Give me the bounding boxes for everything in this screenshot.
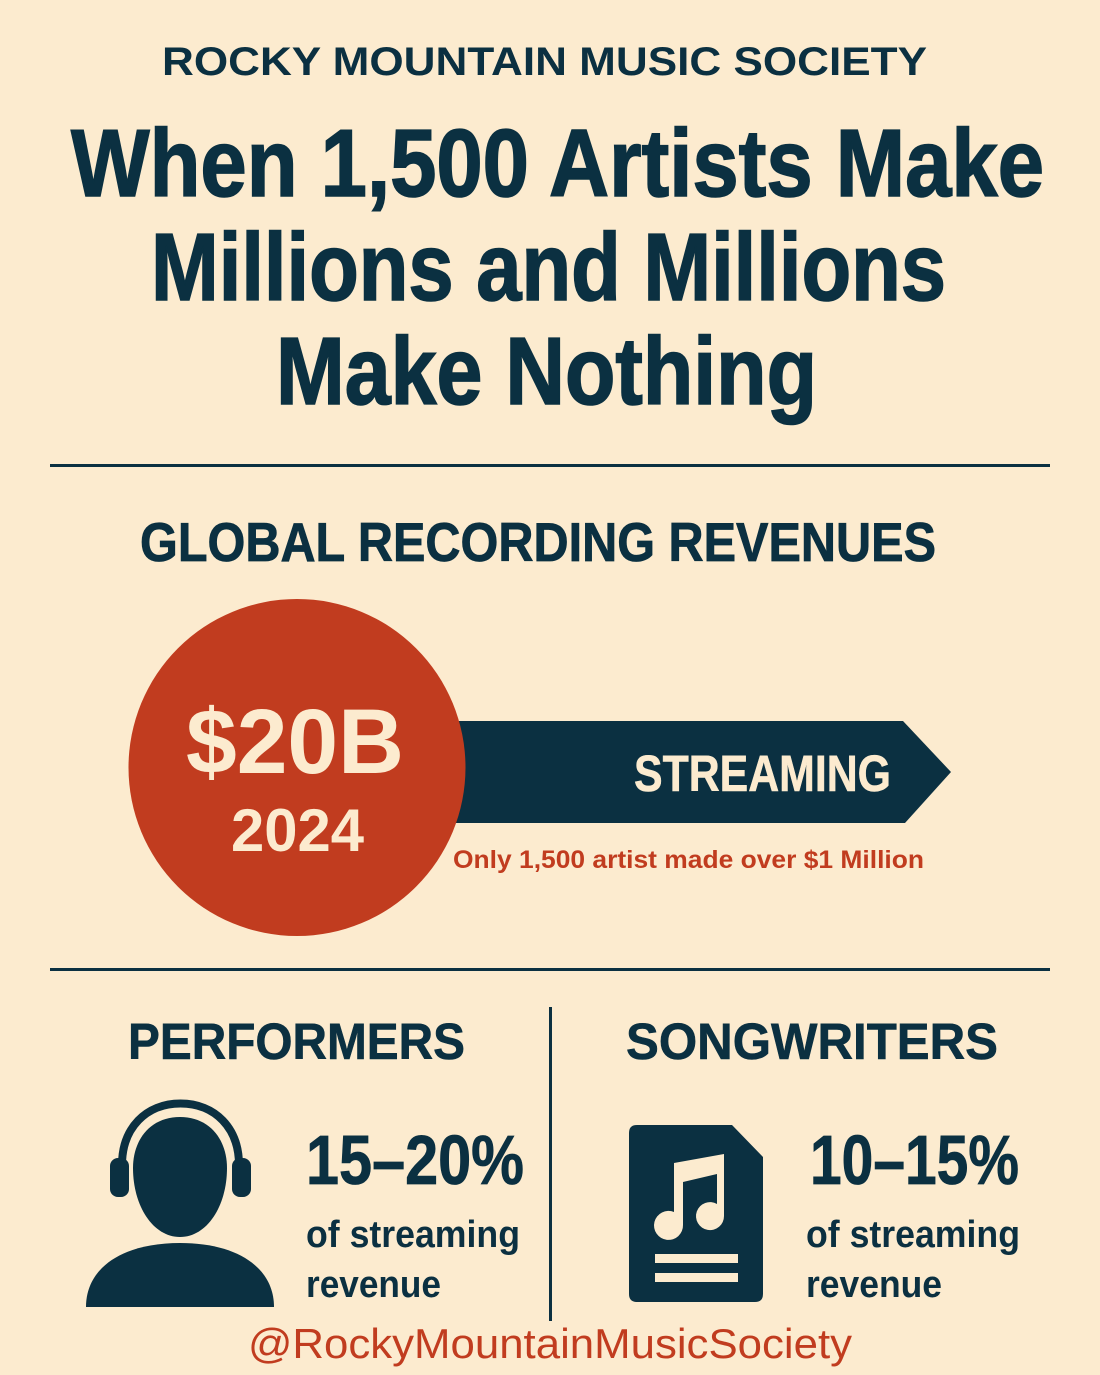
title: [71, 110, 1044, 425]
performers percentage: 15–20%: [306, 1121, 524, 1199]
songwriters heading: SONGWRITERS: [626, 1013, 998, 1070]
title: Make Nothing: [276, 318, 817, 425]
callout: artists over $1 million: Only 1,500 artist made over $1 Million: [453, 846, 924, 874]
performers description: [306, 1214, 520, 1306]
circle: $20B 2024: 2024: [231, 797, 365, 864]
icon: music document: [629, 1125, 763, 1302]
songwriters description: [806, 1214, 1020, 1306]
performers description: revenue: [306, 1264, 441, 1306]
songwriters percentage: 10–15%: [810, 1121, 1019, 1199]
circle: $20B 2024: $20B: [186, 691, 404, 793]
performers heading: PERFORMERS: [128, 1013, 465, 1070]
songwriters description: of streaming: [806, 1214, 1020, 1256]
songwriters description: revenue: [806, 1264, 942, 1306]
arrow: streaming: STREAMING: [634, 745, 891, 802]
icon: person with headphones: [86, 1104, 274, 1307]
panel: performers: [86, 1013, 524, 1307]
social handle: @RockyMountainMusicSociety: [248, 1320, 852, 1367]
title: Millions and Millions: [151, 214, 946, 321]
section heading: global recording revenues: GLOBAL RECORDING REVENUES: [140, 511, 936, 573]
arrow: streaming: [455, 721, 951, 823]
performers description: of streaming: [306, 1214, 520, 1256]
panel: songwriters: [626, 1013, 1020, 1306]
organization name: ROCKY MOUNTAIN MUSIC SOCIETY: [162, 40, 927, 84]
circle: $20B 2024: [128, 599, 466, 936]
